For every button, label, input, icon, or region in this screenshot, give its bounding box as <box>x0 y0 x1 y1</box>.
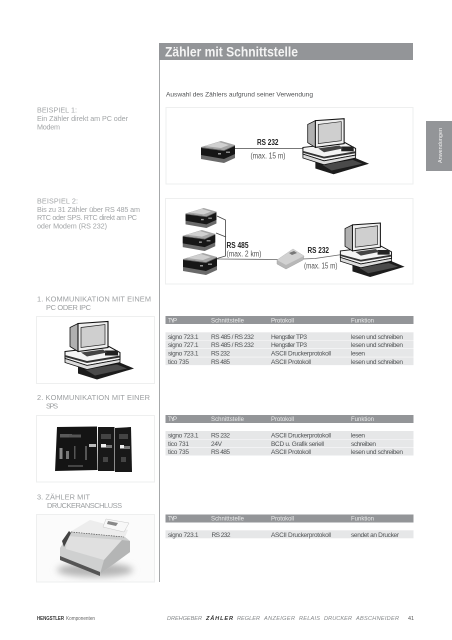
footer brand: HENGSTLER <box>37 616 64 622</box>
table 1 rows: signo 727.1 <box>168 342 199 349</box>
footer product navigation: ZÄHLER <box>205 615 233 622</box>
table 2 rows <box>166 431 414 456</box>
label RS 485: RS 485 <box>226 241 249 250</box>
table 3 header <box>166 514 414 522</box>
icon: PC <box>340 223 405 277</box>
table 1 header: TYP <box>168 318 177 324</box>
icon: counter bottom <box>183 253 217 275</box>
title bar: Zähler mit Schnittstelle <box>165 44 298 60</box>
heading: Kommunikation PC: PC ODER IPC <box>46 303 92 312</box>
table 2 rows: ASCII Protokoll <box>271 449 312 456</box>
text block: Beispiel 2: BEISPIEL 2: <box>37 196 78 205</box>
table 1 header: Protokoll <box>271 318 294 324</box>
table 1 rows: Hengstler TP3 <box>271 334 307 341</box>
table 1 rows: signo 723.1 <box>168 350 199 358</box>
table 2 <box>166 415 414 456</box>
heading: Kommunikation SPS: SPS <box>46 401 58 410</box>
table 3 header: TYP <box>168 516 177 522</box>
cable to converter <box>217 258 278 260</box>
table 1 rows: ASCII Druckerprotokoll <box>271 350 332 358</box>
printer shadow <box>57 563 133 577</box>
heading: Zähler mit Druckeranschluss <box>37 492 122 510</box>
table 2 header: Funktion <box>351 417 374 423</box>
printer <box>60 519 130 576</box>
cable to PC <box>302 254 342 259</box>
table 1 rows: signo 723.1 <box>168 334 199 341</box>
table 2 rows: tico 735 <box>168 449 189 456</box>
table 1 rows: RS 485 / RS 232 <box>211 342 254 349</box>
text block: Beispiel 2: oder Modem (RS 232) <box>37 222 107 230</box>
footer brand <box>37 616 95 622</box>
table 2 rows: ASCII Druckerprotokoll <box>271 432 332 440</box>
text block: Beispiel 2 <box>37 196 140 230</box>
text block: Beispiel 2: RTC oder SPS. RTC direkt am PC <box>37 213 137 222</box>
label max 15 m: (max. 15 m) <box>304 262 338 270</box>
table 2 rows: BCD u. Grafik seriell <box>271 441 325 448</box>
table 1 rows: lesen <box>351 350 365 358</box>
wiring branch <box>216 233 226 237</box>
diagram panel: RS 485 network <box>166 198 413 284</box>
table 2 rows: RS 232 <box>211 432 230 440</box>
table 3 row: ASCII Druckerprotokoll <box>271 532 332 539</box>
table 2 header: TYP <box>168 417 177 423</box>
icon: PC <box>65 322 134 380</box>
table 1 <box>166 316 414 366</box>
table 1 rows: lesen und schreiben <box>351 359 403 366</box>
table 2 rows: lesen und schreiben <box>351 449 403 456</box>
vertical rule <box>159 60 160 582</box>
diagram panel: single counter to PC <box>166 108 413 184</box>
footer brand: Komponenten <box>66 616 95 622</box>
side tab: Anwendungen: Anwendungen <box>438 128 444 163</box>
footer product navigation <box>167 615 399 622</box>
table 1 rows: RS 485 / RS 232 <box>211 334 254 341</box>
table 3 row: sendet an Drucker <box>351 532 400 539</box>
image panel: printer <box>36 514 154 582</box>
footer product navigation: REGLER <box>237 616 260 622</box>
table 3 header: Schnittstelle <box>211 516 245 522</box>
icon: counter <box>201 141 235 163</box>
table 2 rows: RS 485 <box>211 449 230 456</box>
table 1 header <box>166 316 414 324</box>
heading: Kommunikation SPS <box>37 393 150 410</box>
table 1 rows: RS 485 <box>211 359 230 366</box>
label max 15 m: (max. 15 m) <box>250 152 286 160</box>
table 1 rows: tico 735 <box>168 359 189 366</box>
table 1 rows <box>166 332 414 366</box>
footer product navigation: ABSCHNEIDER <box>355 616 399 622</box>
table 2 header: Schnittstelle <box>211 417 245 423</box>
table 1 header: Funktion <box>351 318 374 324</box>
label RS 232: RS 232 <box>257 138 279 147</box>
footer product navigation: DREHGEBER <box>167 616 202 622</box>
text block: Beispiel 1: Ein Zähler direkt am PC oder <box>37 114 129 123</box>
table 3 row: signo 723.1 <box>168 532 199 539</box>
side tab: Anwendungen <box>426 121 452 171</box>
table 2 rows: tico 731 <box>168 441 189 448</box>
title bar <box>159 43 413 60</box>
icon: PC <box>303 119 369 174</box>
wiring <box>217 216 226 258</box>
label RS 232: RS 232 <box>308 246 329 255</box>
heading: Kommunikation SPS: 2. KOMMUNIKATION MIT EINER <box>37 393 150 402</box>
label max 2 km: (max. 2 km) <box>226 250 262 258</box>
table 3 <box>166 514 414 539</box>
heading: Zähler mit Druckeranschluss: 3. ZÄHLER MIT <box>37 492 90 502</box>
table 1 rows: lesen und schreiben <box>351 334 403 341</box>
table 1 header: Schnittstelle <box>211 318 245 324</box>
heading: Kommunikation PC: 1. KOMMUNIKATION MIT EINEM <box>37 294 151 304</box>
PLC modules <box>55 426 132 472</box>
footer product navigation: ANZEIGER <box>263 616 295 622</box>
heading: Zähler mit Druckeranschluss: DRUCKERANSCHLUSS <box>47 501 122 510</box>
icon: counter middle <box>183 230 215 251</box>
heading: Kommunikation PC <box>37 294 151 312</box>
footer product navigation: DRUCKER <box>324 616 352 622</box>
table 3 header: Funktion <box>351 516 374 522</box>
table 2 rows: schreiben <box>351 441 376 448</box>
table 1 rows: RS 232 <box>211 350 230 358</box>
table 1 rows: ASCII Protokoll <box>271 359 312 366</box>
footer product navigation: RELAIS <box>299 616 320 622</box>
image panel: PLC <box>36 416 154 482</box>
text block: Beispiel 1: BEISPIEL 1: <box>37 106 77 114</box>
text block: Beispiel 1 <box>37 106 129 131</box>
table 2 rows: signo 723.1 <box>168 432 199 440</box>
icon: converter <box>277 249 304 269</box>
table 1 rows: lesen und schreiben <box>351 342 403 349</box>
page number: 41 <box>408 616 414 622</box>
table 3 row: RS 232 <box>212 532 231 539</box>
text block: Beispiel 1: Modem <box>37 122 60 131</box>
icon: counter top <box>186 208 216 228</box>
table 3 header: Protokoll <box>271 516 294 522</box>
image panel: PC <box>36 316 154 384</box>
cable RS 232 <box>234 148 303 150</box>
table 2 header <box>166 415 414 423</box>
table 3 row <box>166 530 414 539</box>
text block: Beispiel 2: Bis zu 31 Zähler über RS 485 am <box>37 205 140 214</box>
table 2 rows: 24V <box>211 441 223 448</box>
table 2 header: Protokoll <box>271 417 294 423</box>
table 2 rows: lesen <box>351 432 365 440</box>
intro text: Auswahl des Zählers aufgrund seiner Verwendung <box>166 92 313 98</box>
table 1 rows: Hengstler TP3 <box>271 342 307 349</box>
